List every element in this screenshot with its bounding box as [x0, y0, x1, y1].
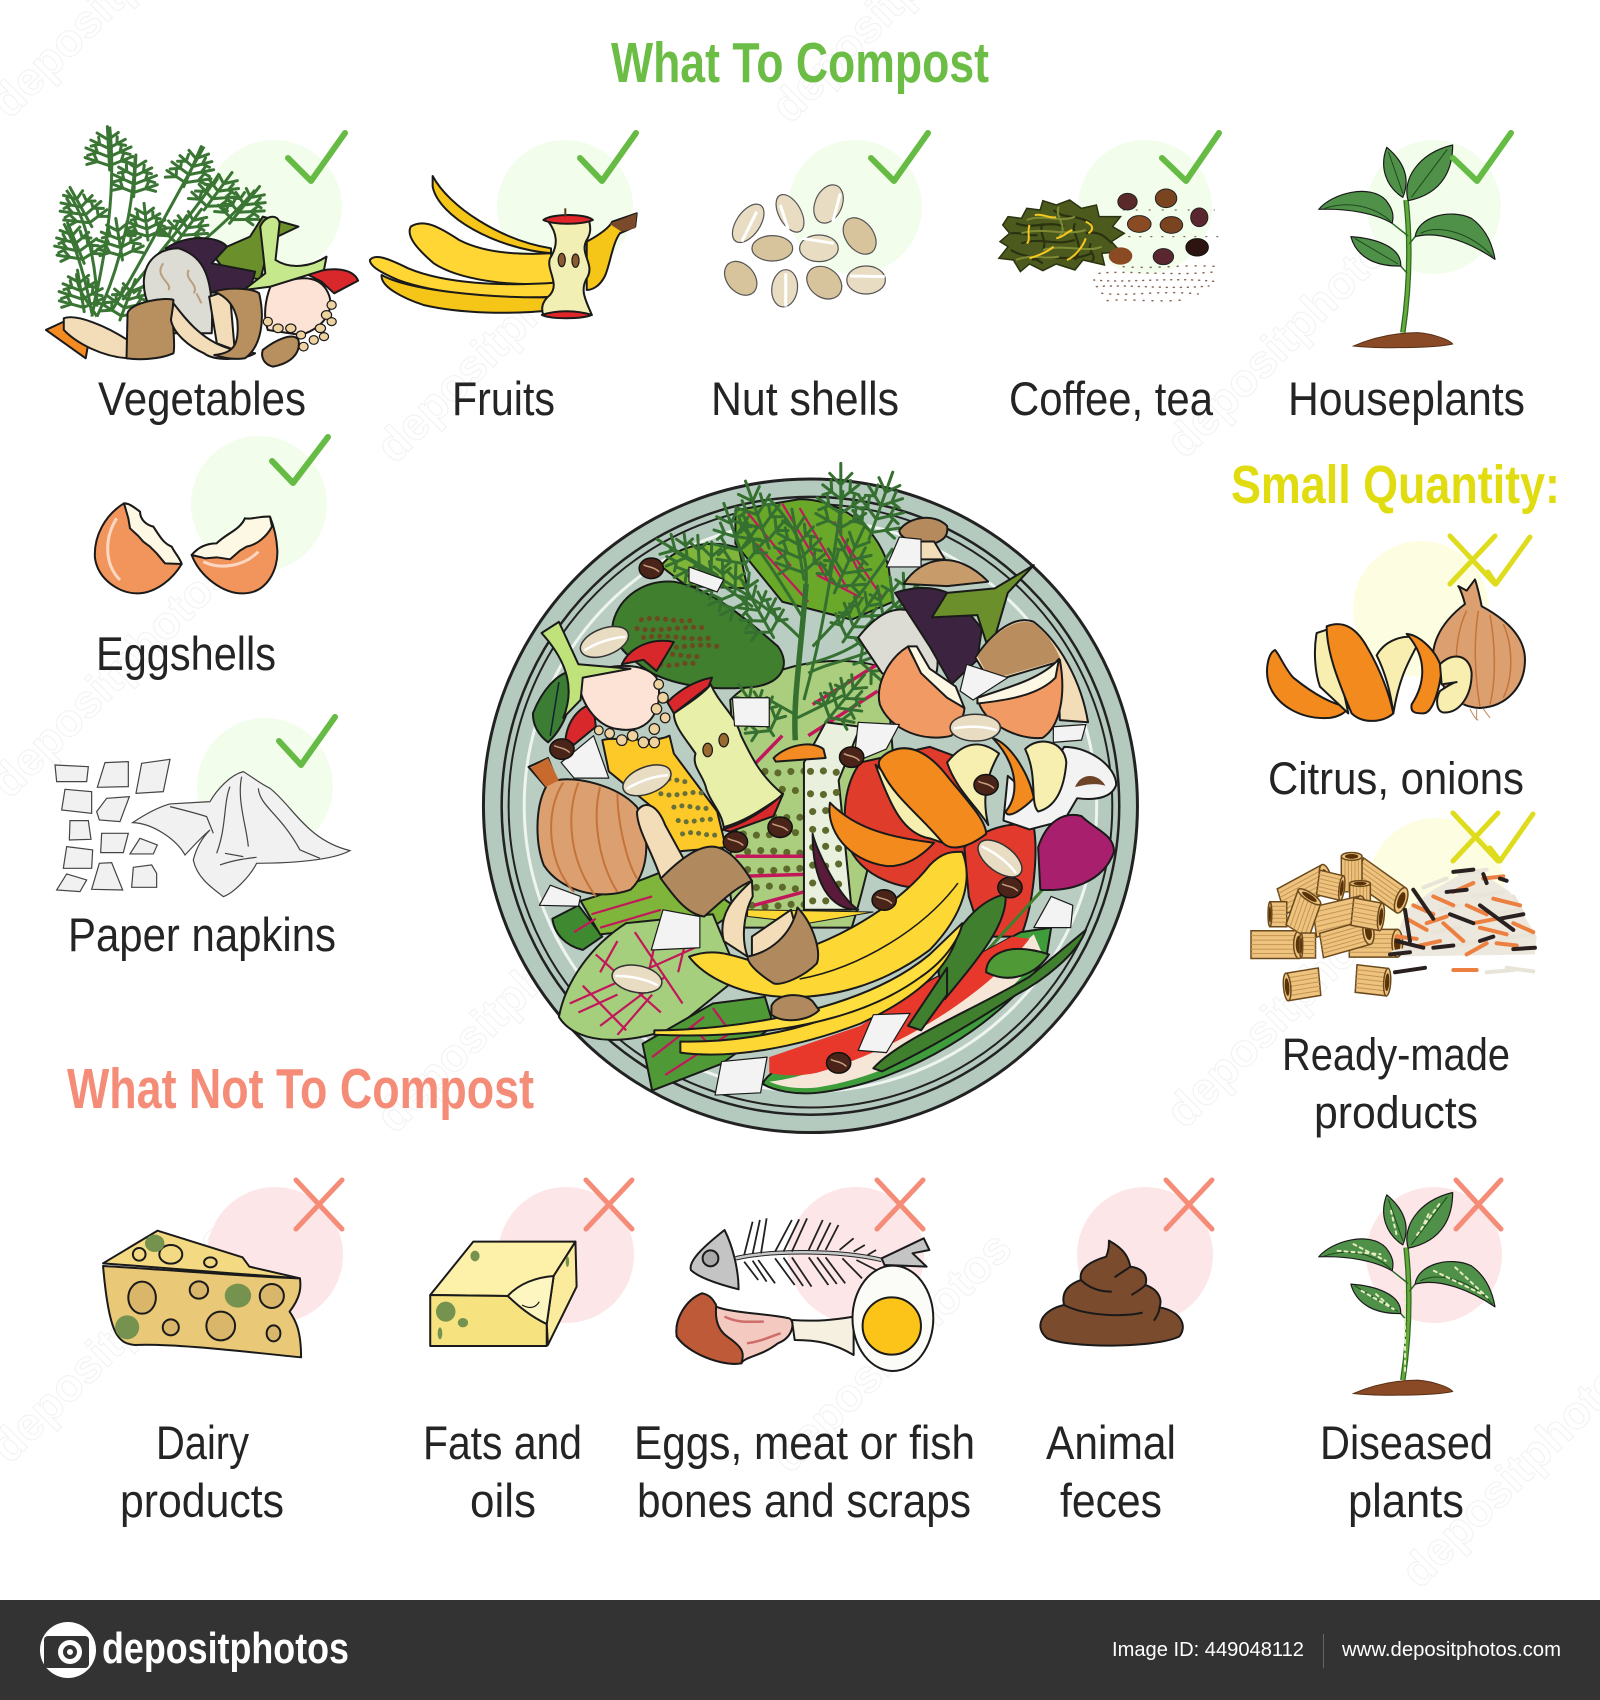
item: citrus, onions — [1267, 536, 1530, 804]
watermark text: depositphotos — [365, 211, 626, 472]
banana peels on plate — [654, 852, 967, 1055]
apple core — [667, 678, 783, 832]
icon: torn paper and napkin — [55, 759, 350, 897]
paper scraps on plate — [539, 537, 1086, 1095]
tulip — [947, 815, 1114, 995]
label: Animal feces: feces — [1060, 1474, 1162, 1527]
icon: nut shells — [719, 183, 885, 307]
icon: fish bones, meat bone, boiled egg — [676, 1218, 933, 1371]
footer bar — [0, 1600, 1600, 1700]
icon: mouldy butter — [430, 1242, 577, 1346]
label: Animal feces — [1046, 1416, 1176, 1527]
item: vegetables — [46, 126, 358, 425]
label: Fats and oils: Fats and — [423, 1416, 582, 1469]
label: Fruits: Fruits — [452, 372, 555, 425]
label: Fats and oils: oils — [470, 1474, 536, 1527]
label: Ready-made products — [1282, 1029, 1510, 1138]
label: Eggs, meat or fish bones and scraps: Eggs, meat or fish — [634, 1416, 975, 1469]
check mark — [871, 133, 928, 181]
website url: www.depositphotos.com — [1341, 1639, 1561, 1661]
watermelon rind — [763, 928, 1051, 1093]
watermark text: depositphotos — [365, 881, 626, 1142]
label: Ready-made products: Ready-made — [1282, 1029, 1510, 1080]
item: eggshells — [95, 436, 328, 680]
carrot tops — [645, 463, 947, 749]
orange peel on plate — [829, 738, 1066, 866]
label: Dairy products — [120, 1416, 284, 1527]
label: Diseased plants: plants — [1348, 1474, 1464, 1527]
carrot stump — [774, 744, 826, 762]
eggshells on plate — [879, 646, 1062, 738]
label: Dairy products: products — [120, 1474, 284, 1527]
watermark text: depositphotos — [760, 1221, 1021, 1482]
icon: orange peel and onion — [1267, 579, 1525, 721]
icon: tea leaves and coffee grounds — [999, 189, 1220, 301]
icon: vegetable scraps — [46, 126, 358, 367]
check mark — [1162, 133, 1219, 181]
icon: banana peels and apple core — [370, 176, 637, 318]
label: Vegetables: Vegetables — [98, 372, 306, 425]
heading: What To Compost: What To Compost — [611, 31, 989, 95]
item: nut shells — [711, 133, 928, 425]
cross mark — [296, 1180, 342, 1229]
item: animal feces — [1040, 1180, 1213, 1527]
caution mark — [1453, 813, 1533, 861]
plate — [483, 479, 1137, 1133]
item: coffee and tea — [999, 133, 1220, 425]
check mark — [580, 133, 636, 181]
caution mark — [1450, 536, 1530, 584]
watermark text: depositphotos — [1155, 876, 1416, 1137]
icon: animal feces — [1040, 1241, 1183, 1346]
icon: mouldy cheese — [103, 1231, 301, 1357]
cross mark — [1166, 1180, 1212, 1229]
central plate of compostable food — [483, 463, 1137, 1133]
check mark — [279, 717, 335, 765]
icon: healthy plant — [1319, 145, 1495, 348]
label: Nut shells: Nut shells — [711, 372, 899, 425]
item: diseased plants — [1319, 1180, 1502, 1527]
label: Eggs, meat or fish bones and scraps: bones and scraps — [637, 1474, 971, 1527]
label: Animal feces: Animal — [1046, 1416, 1176, 1469]
label: Coffee, tea: Coffee, tea — [1009, 372, 1214, 425]
label: Eggs, meat or fish bones and scraps — [634, 1416, 975, 1527]
label: Fats and oils — [423, 1416, 582, 1527]
cross mark — [877, 1180, 923, 1229]
leafy greens — [533, 499, 893, 1091]
check mark — [272, 437, 328, 483]
item: houseplants — [1288, 133, 1525, 425]
watermark text: depositphotos — [1155, 206, 1416, 467]
label: Diseased plants: Diseased — [1320, 1416, 1493, 1469]
image id: Image ID: 449048112 — [1112, 1639, 1304, 1661]
onion — [529, 758, 646, 896]
item: ready-made products — [1251, 813, 1537, 1138]
red apple and fruit pieces — [813, 747, 1116, 937]
icon: diseased plant — [1319, 1192, 1495, 1395]
label: Diseased plants — [1320, 1416, 1493, 1527]
cross mark — [1456, 1180, 1501, 1229]
potato peel ribbon — [637, 805, 819, 1020]
label: Eggshells: Eggshells — [96, 627, 276, 680]
nut shells on plate — [576, 621, 1028, 997]
label: Houseplants: Houseplants — [1288, 372, 1525, 425]
label: Paper napkins: Paper napkins — [68, 908, 336, 961]
avocado — [613, 581, 784, 688]
green beans and leaf — [873, 894, 1086, 1071]
icon: pasta and rice — [1251, 852, 1537, 1001]
lemon squash, cabbage stem and lentils — [542, 622, 726, 852]
icon: depositphotos camera logo — [40, 1622, 96, 1678]
item: dairy products — [103, 1180, 343, 1527]
check mark — [1453, 133, 1511, 181]
item: fats and oils — [423, 1180, 634, 1527]
brand name: depositphotos — [102, 1624, 349, 1673]
icon: eggshells — [95, 503, 277, 593]
cross mark — [586, 1180, 632, 1229]
item: eggs, meat or fish — [634, 1180, 975, 1527]
label: Citrus, onions: Citrus, onions — [1268, 753, 1524, 804]
label: Dairy products: Dairy — [156, 1416, 249, 1469]
coffee beans on plate — [550, 558, 1022, 1073]
check mark — [288, 133, 345, 181]
label: Ready-made products: products — [1314, 1087, 1478, 1138]
top right vegetables — [858, 518, 1088, 722]
item: paper napkins — [55, 717, 350, 961]
heading: What Not To Compost: What Not To Compost — [67, 1057, 534, 1121]
item: fruits — [370, 133, 637, 425]
